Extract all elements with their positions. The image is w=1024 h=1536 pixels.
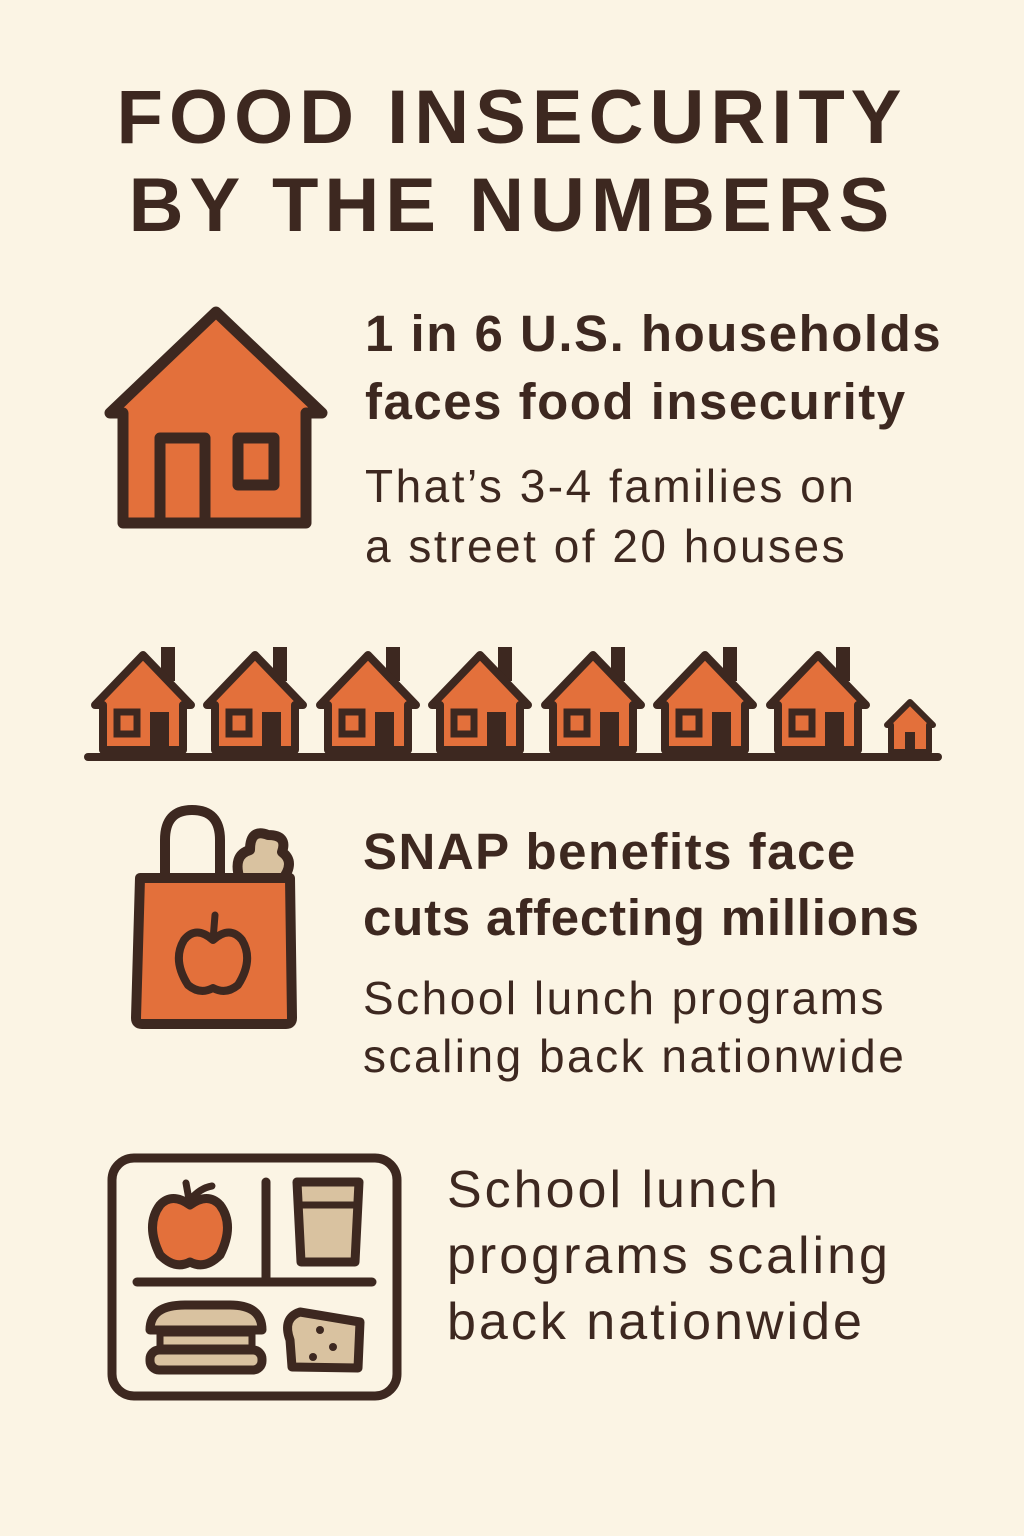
stat 2 text: scaling back nationwide [363, 1030, 906, 1082]
title: FOOD INSECURITY [117, 75, 907, 160]
stat 1 text: a street of 20 houses [365, 520, 847, 572]
stat 1 text: faces food insecurity [365, 373, 907, 430]
title: BY THE NUMBERS [129, 163, 895, 248]
stat 3 text: programs scaling [447, 1227, 891, 1285]
stat 1 text: That’s 3-4 families on [365, 460, 856, 512]
icon: row of houses on street [88, 647, 938, 757]
stat 2 text [363, 823, 920, 1082]
stat 2 text: School lunch programs [363, 972, 886, 1024]
stat 1 text: 1 in 6 U.S. households [365, 305, 942, 362]
stat 2 text: cuts affecting millions [363, 889, 920, 946]
stat 3 text [447, 1161, 891, 1351]
stat 3 text: back nationwide [447, 1293, 865, 1351]
title [117, 75, 907, 248]
icon: grocery bag [136, 810, 292, 1024]
icon: lunch tray [112, 1158, 397, 1396]
icon: big house [110, 312, 322, 523]
stat 1 text [365, 305, 942, 572]
stat 3 text: School lunch [447, 1161, 781, 1219]
stat 2 text: SNAP benefits face [363, 823, 857, 880]
